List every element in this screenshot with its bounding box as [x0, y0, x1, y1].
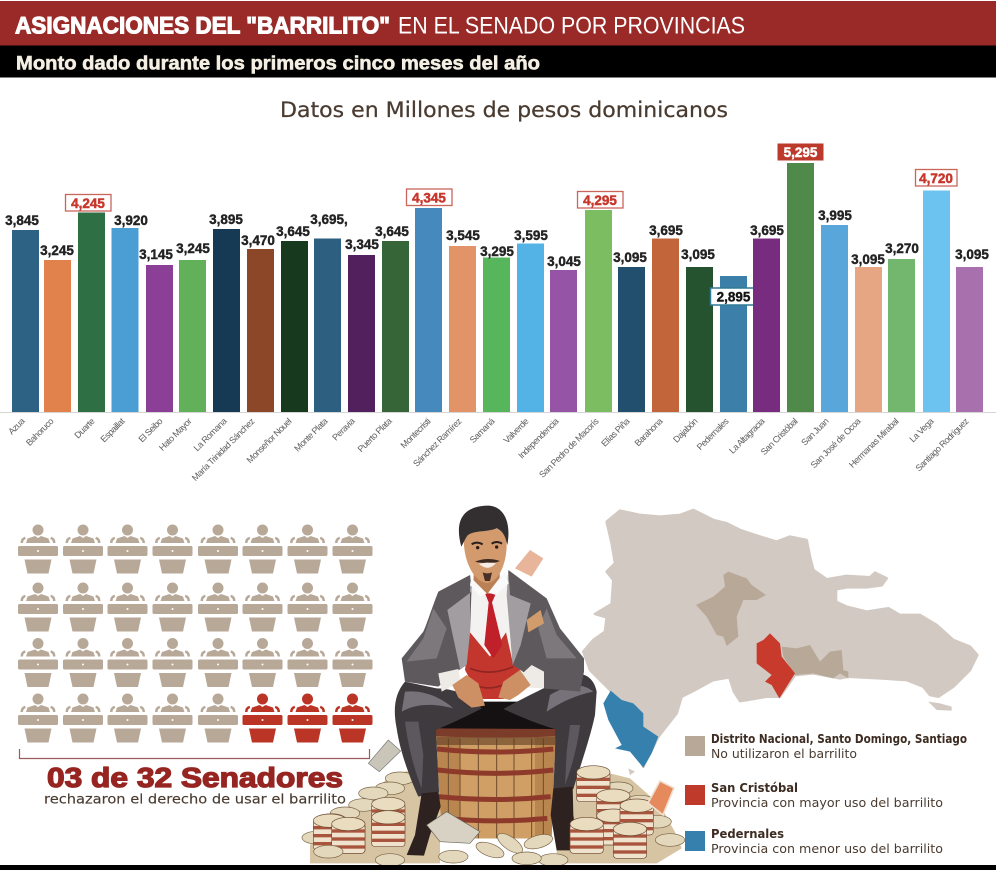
- orange note near legend: [648, 781, 674, 815]
- bar: San José de Ocoa: 3,095: [851, 252, 885, 267]
- bar: Sánchez Ramírez: 3,545: [446, 228, 480, 243]
- bar: Samaná: [468, 244, 514, 445]
- bar: Hato Mayor: Hato Mayor: [157, 416, 194, 453]
- bar: Santiago Rodríguez: Santiago Rodríguez: [913, 416, 971, 473]
- map of Dominican Republic: [583, 510, 977, 775]
- bar: Monseñor Nouel: 3,645: [276, 224, 310, 239]
- bar: Peravia: [330, 237, 379, 443]
- bar: San José de Ocoa: San José de Ocoa: [809, 416, 863, 470]
- vest bands: [470, 667, 513, 688]
- bar: La Altagracia: 3,695: [750, 223, 784, 238]
- bar: Peravia: 3,345: [345, 237, 379, 252]
- bar: Dajabón: [671, 247, 715, 445]
- bar: Santiago Rodríguez: [913, 247, 989, 473]
- jacket: [402, 570, 584, 692]
- hands: [452, 670, 531, 708]
- bar: El Seibo: [136, 247, 173, 444]
- bar: Hermanas Mirabal: Hermanas Mirabal: [847, 416, 901, 470]
- bar: Bahoruco: Bahoruco: [24, 416, 56, 448]
- floating orange note: [515, 550, 543, 577]
- shirt: [467, 575, 513, 665]
- senator icons grid: [18, 524, 372, 742]
- bar: Puerto Plata: 3,645: [375, 224, 409, 239]
- bar: Independencia: [516, 254, 581, 461]
- province: Pedernales: [603, 691, 658, 768]
- legend: lowest usage: [685, 826, 943, 856]
- bar: Sánchez Ramírez: Sánchez Ramírez: [411, 416, 464, 469]
- bar: Barahona: Barahona: [633, 416, 665, 448]
- bar: La Romana: La Romana: [192, 416, 229, 453]
- bar: Valverde: Valverde: [502, 416, 531, 445]
- bar: La Vega: La Vega: [907, 416, 936, 444]
- bar: Duarte: Duarte: [72, 416, 97, 440]
- subtitle banner: [0, 46, 996, 78]
- lapels: [447, 570, 531, 669]
- bar: Montecristi: 4,345: [412, 190, 446, 206]
- bar: Valverde: 3,595: [514, 228, 548, 243]
- bottom black bar: [0, 865, 996, 870]
- floating banknote: [368, 740, 401, 772]
- bar: Monseñor Nouel: Monseñor Nouel: [245, 416, 294, 465]
- senators caption: rechazaron el derecho de usar el barrilito: [44, 792, 346, 808]
- bar: La Altagracia: [727, 223, 784, 456]
- shirt cuffs: [438, 665, 544, 692]
- bar: El Seibo: 3,145: [139, 247, 173, 262]
- senators headline: 03 de 32 Senadores: [47, 762, 343, 793]
- province: San Cristóbal: [757, 633, 795, 698]
- trousers: [395, 674, 597, 797]
- bar: San Pedro de Macorís: San Pedro de Macorís: [537, 416, 601, 480]
- bar: Hato Mayor: 3,245: [176, 241, 210, 256]
- bar: Independencia: 3,045: [547, 254, 581, 269]
- bar: Puerto Plata: [356, 224, 409, 454]
- bar: Monseñor Nouel: [245, 224, 310, 465]
- bar: San Juan: San Juan: [799, 416, 831, 447]
- legend: lowest usage: Provincia con menor uso del barrilito: [711, 841, 943, 856]
- collar: [470, 571, 509, 597]
- bar: La Vega: [907, 170, 957, 444]
- legend: no usage: No utilizaron el barrilito: [711, 746, 857, 761]
- subtitle banner: Monto dado durante los primeros cinco meses del año: [16, 52, 540, 74]
- neck: [473, 567, 500, 594]
- bar: Dajabón: 3,095: [681, 247, 715, 262]
- bar: Azua: 3,845: [5, 213, 39, 228]
- bar: Elías Piña: [599, 250, 647, 449]
- head: [459, 506, 508, 583]
- bar: San Juan: 3,995: [818, 208, 852, 223]
- bar: Monte Plata: Monte Plata: [292, 416, 330, 453]
- pocket note: [527, 610, 544, 632]
- bar: Duarte: [66, 194, 111, 440]
- province: Santo Domingo and Distrito Nacional: [782, 645, 848, 678]
- bar: Espaillat: 3,920: [114, 213, 148, 228]
- bar: Hermanas Mirabal: [847, 241, 919, 470]
- legend: lowest usage: Pedernales: [711, 826, 784, 841]
- bar: Samaná: Samaná: [468, 416, 497, 445]
- bar: Montecristi: Montecristi: [398, 416, 433, 450]
- bar: Peravia: Peravia: [330, 416, 357, 443]
- bar: Barahona: [633, 223, 683, 448]
- vest: [465, 632, 521, 699]
- bar: La Romana: 3,895: [209, 212, 243, 227]
- bar: Duarte: 4,245: [71, 196, 105, 211]
- chart title: Datos en Millones de pesos dominicanos: [280, 98, 728, 122]
- shoes: [407, 787, 578, 856]
- bar: Pedernales: Pedernales: [695, 416, 731, 452]
- bar: Azua: [5, 213, 39, 437]
- bar: San Cristóbal: San Cristóbal: [759, 416, 800, 457]
- bar: Bahoruco: 3,245: [40, 243, 74, 258]
- bar: La Vega: 4,720: [919, 171, 953, 186]
- bar: Bahoruco: [24, 243, 74, 448]
- bar: Barahona: 3,695: [649, 223, 683, 238]
- bar: Monte Plata: 3,695,: [310, 212, 348, 227]
- tie: [484, 593, 502, 658]
- barrel: [436, 727, 556, 838]
- bar: Valverde: [502, 228, 548, 445]
- back coin pile: [302, 768, 682, 863]
- bar: Elías Piña: 3,095: [613, 250, 647, 265]
- province: Santiago: [696, 572, 766, 646]
- bar: Samaná: 3,295: [480, 244, 514, 259]
- bar: El Seibo: El Seibo: [136, 416, 165, 444]
- bar: Hermanas Mirabal: 3,270: [885, 241, 919, 256]
- bar: Espaillat: [98, 213, 148, 444]
- bar: San Cristóbal: 5,295: [784, 145, 818, 160]
- bar: Pedernales: 2,895: [717, 290, 751, 304]
- bar: Monte Plata: [292, 212, 348, 453]
- legend: highest usage: Provincia con mayor uso del barrilito: [711, 795, 943, 810]
- illustration: man sitting on a barrel with coins: [302, 506, 685, 866]
- bar: Sánchez Ramírez: [411, 228, 480, 469]
- bar: Azua: Azua: [6, 416, 27, 437]
- bar: San Juan: [799, 208, 852, 447]
- bar: Montecristi: [398, 189, 452, 450]
- title banner: ASIGNACIONES DEL "BARRILITO": [15, 12, 390, 40]
- legend: highest usage: [685, 780, 943, 810]
- title banner: EN EL SENADO POR PROVINCIAS: [398, 12, 745, 40]
- bar: Hato Mayor: [157, 241, 210, 453]
- bar: Dajabón: Dajabón: [671, 416, 700, 445]
- bar: María Trinidad Sánchez: [190, 233, 275, 483]
- jacket highlights: [407, 608, 577, 662]
- bar: San Pedro de Macorís: [537, 192, 623, 480]
- bar: Puerto Plata: Puerto Plata: [356, 416, 394, 454]
- bracket under senators: [20, 749, 370, 758]
- legend: no usage: [685, 731, 967, 761]
- bar: Elías Piña: Elías Piña: [599, 416, 632, 449]
- bar: Pedernales: [695, 276, 756, 452]
- front coins and stacks: [313, 766, 685, 866]
- title banner: [0, 1, 996, 46]
- bar: Independencia: Independencia: [516, 416, 561, 461]
- bar: María Trinidad Sánchez: María Trinidad Sánchez: [190, 416, 257, 483]
- bar: La Romana: [192, 212, 243, 453]
- bar: San Cristóbal: [759, 144, 824, 457]
- legend: highest usage: San Cristóbal: [711, 780, 798, 795]
- bar: María Trinidad Sánchez: 3,470: [241, 233, 275, 248]
- bar chart: [0, 144, 996, 483]
- bar: San José de Ocoa: [809, 252, 885, 470]
- bar: San Pedro de Macorís: 4,295: [583, 193, 617, 208]
- bar: Espaillat: Espaillat: [98, 416, 127, 444]
- bar: La Altagracia: La Altagracia: [727, 416, 767, 456]
- bar: Santiago Rodríguez: 3,095: [955, 247, 989, 262]
